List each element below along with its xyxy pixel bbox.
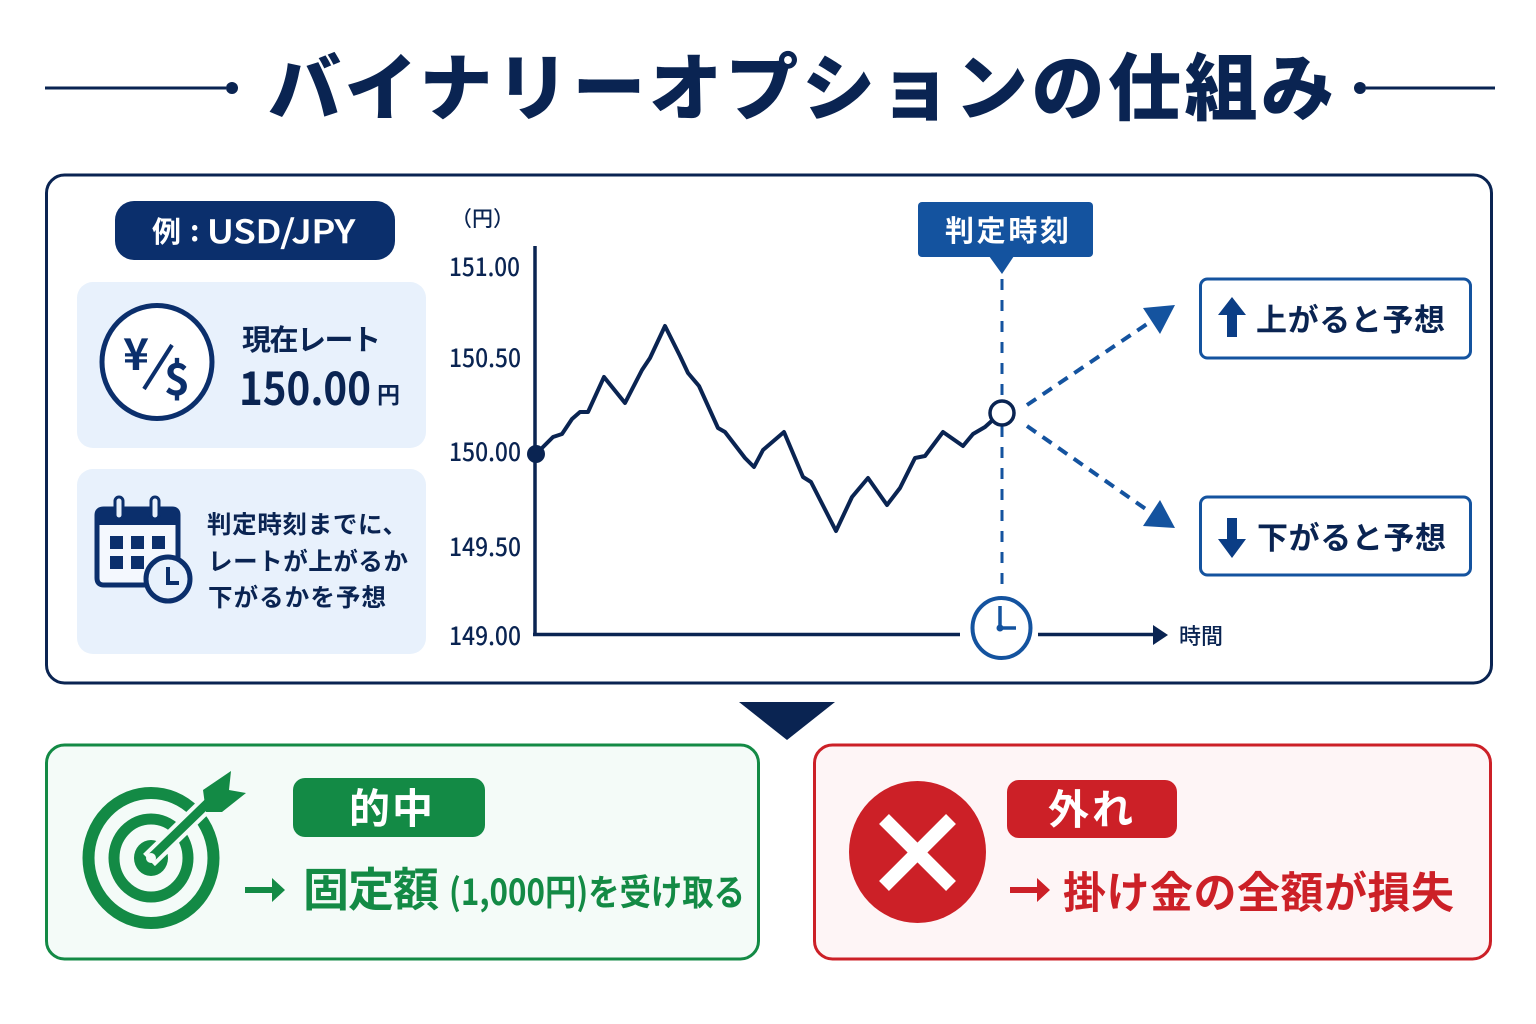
- box: predict down: [1200, 497, 1470, 575]
- y axis labels: 151.00: [449, 248, 520, 284]
- axes: [533, 246, 1168, 645]
- hit result text: [303, 854, 745, 920]
- arrow: miss: [1010, 878, 1050, 902]
- icon: yen dollar coin: [102, 306, 212, 418]
- icon: yen dollar coin: ¥: [123, 319, 149, 383]
- badge: currency pair: USD/JPY: [207, 207, 355, 253]
- instruction text: 判定時刻までに、: [207, 506, 407, 541]
- rate label: 現在レート: [242, 317, 381, 359]
- icon: yen dollar coin: $: [164, 344, 190, 408]
- chart: [449, 202, 1223, 658]
- price line: [527, 326, 995, 531]
- y axis labels: 150.00: [449, 433, 521, 469]
- panel: miss: [814, 745, 1490, 959]
- box: predict up: 上がると予想: [1256, 295, 1445, 340]
- rate unit: 円: [377, 376, 400, 410]
- badge: hit: [293, 775, 485, 837]
- rate value: 150.00: [239, 353, 371, 418]
- badge: currency pair: [115, 201, 395, 260]
- badge: hit: 的中: [349, 775, 433, 835]
- y axis labels: 150.50: [449, 339, 521, 375]
- arrow: to results: [739, 702, 835, 740]
- box: predict down: 下がると予想: [1257, 513, 1446, 558]
- decision time label: [918, 202, 1093, 274]
- instruction text: [207, 506, 408, 614]
- instruction text: レートが上がるか: [208, 543, 408, 578]
- badge: currency pair: 例: [152, 209, 181, 251]
- panel: chart example: [46, 175, 1492, 683]
- decision time guide: [1000, 279, 1004, 590]
- y axis labels: 149.00: [449, 617, 521, 653]
- title: バイナリーオプションの仕組み: [268, 30, 1334, 136]
- icon: clock: [972, 598, 1030, 658]
- instruction text: 下がるかを予想: [208, 579, 386, 614]
- decision time label: 判定時刻: [945, 208, 1069, 250]
- icon: target with arrow: [88, 771, 246, 923]
- hit result text: (1,000円)を受け取る: [449, 864, 745, 916]
- icon: cross: [849, 781, 986, 923]
- panel: win: [46, 745, 758, 959]
- decision point: [990, 401, 1014, 425]
- arrow: up scenario: [1027, 305, 1175, 405]
- arrow: down scenario: [1027, 426, 1175, 528]
- badge: currency pair: :: [190, 208, 199, 250]
- x axis label: 時間: [1179, 619, 1223, 651]
- card: current rate: [77, 282, 426, 448]
- box: predict up: [1200, 279, 1470, 358]
- badge: miss: 外れ: [1048, 776, 1133, 836]
- card: instruction: [77, 469, 426, 654]
- miss result text: 掛け金の全額が損失: [1063, 859, 1454, 921]
- arrow: hit: [245, 878, 285, 902]
- y axis labels: [449, 203, 521, 653]
- badge: miss: [1007, 776, 1177, 838]
- y axis labels: （円）: [451, 203, 514, 233]
- hit result text: 固定額: [303, 854, 439, 920]
- y axis labels: 149.50: [449, 528, 521, 564]
- icon: calendar with clock: [97, 497, 190, 601]
